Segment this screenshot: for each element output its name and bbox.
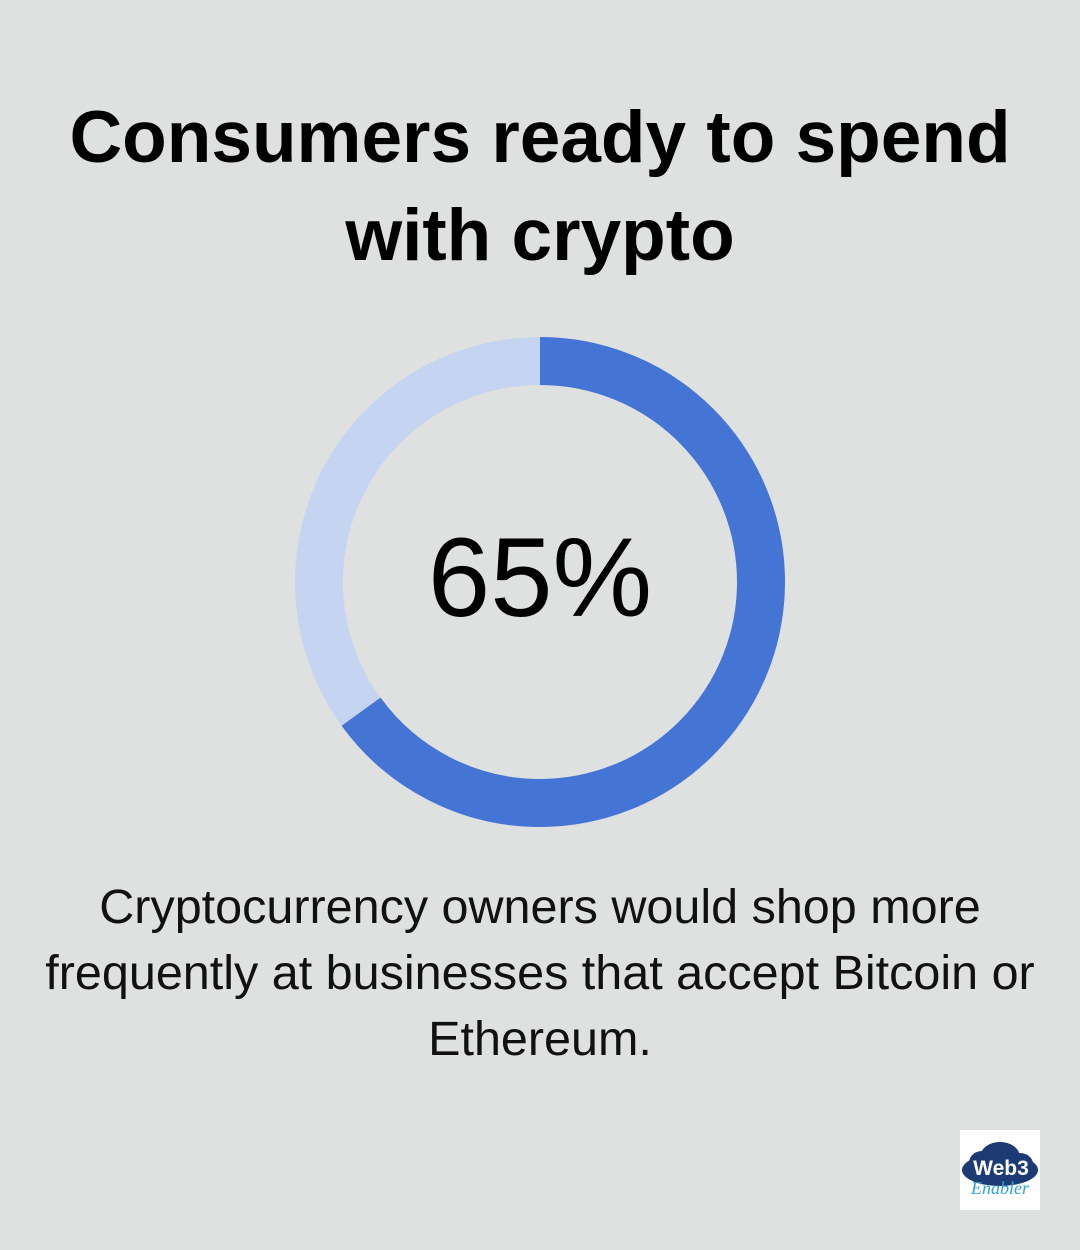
description: frequently at businesses that accept Bitcoin or	[45, 946, 1035, 1000]
logo: Enabler	[970, 1178, 1030, 1198]
logo: Web3	[973, 1157, 1029, 1180]
donut chart: 65%	[428, 515, 652, 640]
description: Cryptocurrency owners would shop more	[99, 880, 981, 934]
title: with crypto	[345, 195, 735, 276]
title	[69, 97, 1011, 276]
description: Ethereum.	[428, 1012, 652, 1066]
title: Consumers ready to spend	[69, 97, 1011, 178]
description	[45, 880, 1035, 1066]
logo	[960, 1130, 1040, 1210]
